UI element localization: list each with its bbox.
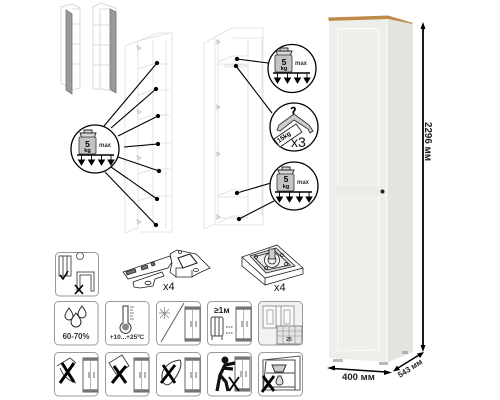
tile: humidity 60-70%: [54, 302, 98, 345]
callout: 5 kg max bottom right: kg: [283, 184, 289, 190]
callout: 5 kg max top right: 5: [282, 57, 287, 67]
tile: room ventilation window: [258, 302, 302, 345]
dimension: width: 400 мм: [342, 372, 375, 383]
tile: no rough cloth: [156, 352, 200, 396]
hinge part x4: x4: [163, 281, 175, 293]
callout: hanger 5 kg x3: [270, 103, 318, 151]
callout: 5 kg max top right: kg: [281, 66, 287, 72]
tile: temperature: [106, 302, 149, 345]
callout: hanger 5 kg x3: x3: [291, 134, 306, 150]
dimension: height: [420, 22, 433, 352]
leader lines: shelves right: [234, 57, 274, 221]
callout: 5 kg max left: 5: [85, 139, 90, 149]
open cabinet with shelves: [125, 33, 172, 233]
dimension: width: [327, 366, 392, 383]
tile: door alignment: [56, 252, 98, 296]
callout: 5 kg max top right: [268, 44, 316, 92]
wardrobe product image: [328, 16, 413, 365]
tile: distance from heater: ≥1м: [214, 305, 230, 315]
small cabinet left view: [61, 4, 80, 94]
tile: temperature: +10...+25ºC: [110, 334, 145, 341]
tile: no overloading shelf: [258, 352, 302, 396]
small cabinet right view: [93, 3, 116, 93]
tile: no liquid cleaner: [106, 352, 149, 396]
dimension: height: 2296 мм: [422, 122, 433, 161]
callout: 5 kg max left: [71, 125, 119, 173]
callout: 5 kg max bottom right: max: [297, 180, 310, 186]
tile: do not push furniture: [208, 352, 252, 396]
open cabinet with hanging rail: [204, 28, 263, 229]
callout: 5 kg max left: max: [99, 143, 112, 149]
tile: humidity 60-70%: 60-70%: [63, 332, 90, 341]
tile: room ventilation window: 25: [286, 337, 292, 343]
mounting base x4: x4: [274, 282, 286, 294]
callout: hanger 5 kg x3: 15kg: [276, 130, 292, 145]
callout: 5 kg max left: kg: [84, 148, 91, 154]
mounting base x4: [242, 245, 303, 294]
callout: 5 kg max top right: max: [295, 61, 308, 67]
tile: distance from heater: [208, 302, 252, 345]
hinge part x4: [123, 250, 210, 293]
leader lines: shelves left: [104, 61, 161, 227]
tile: avoid sunlight: [156, 302, 200, 345]
tile: no water spray: [54, 352, 98, 396]
callout: 5 kg max bottom right: 5: [284, 174, 289, 184]
callout: 5 kg max bottom right: [270, 162, 318, 210]
dimension: depth: 543 мм: [396, 357, 424, 380]
